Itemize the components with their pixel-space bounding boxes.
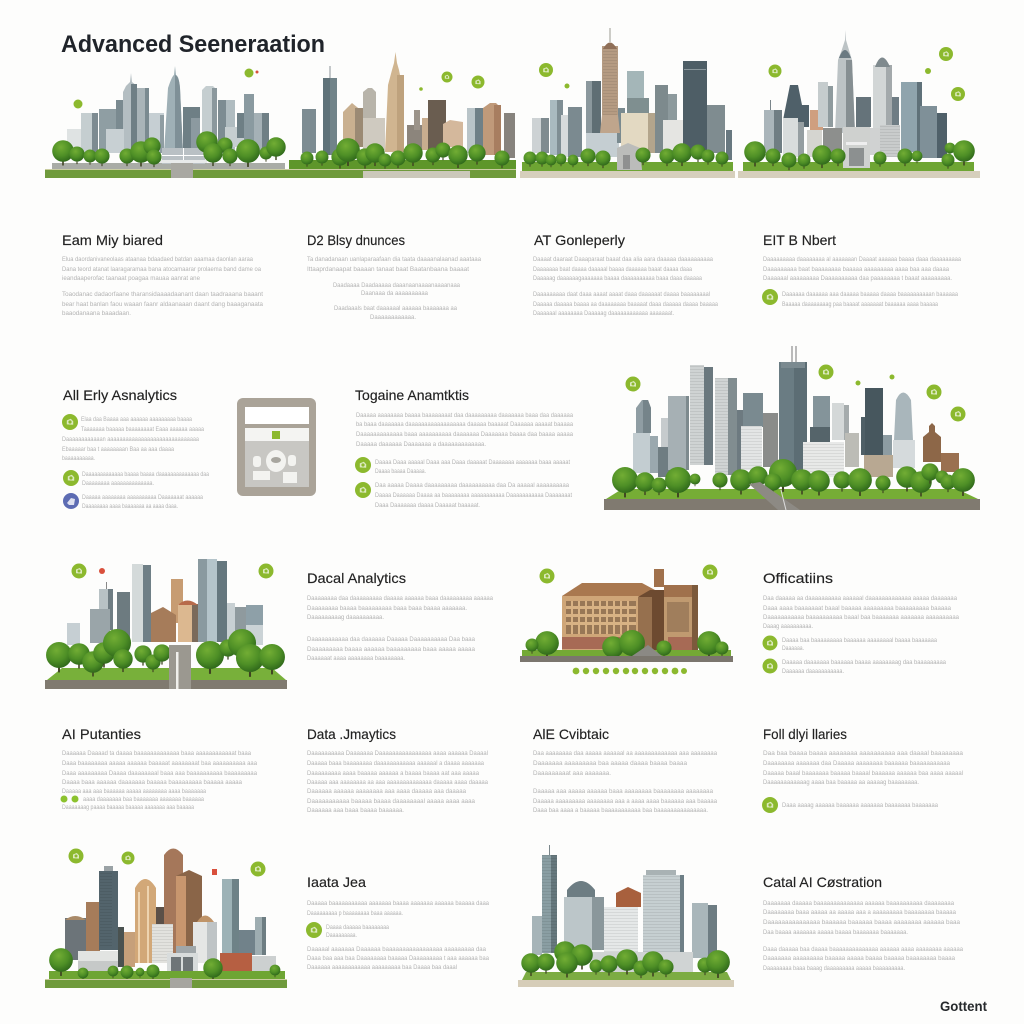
bullet text 1: Daaaa baaaa Daaaaa. — [375, 468, 426, 475]
dot row — [573, 668, 687, 674]
text block: Daaaaaaaaaaa daa daaaaaa Daaaaa Daaaaaaaaaa Daa baaa — [307, 636, 475, 643]
icon: bullet 2 — [762, 658, 778, 674]
panel: EIT B Nbert — [762, 232, 961, 308]
text block: Daaaaaaaaa aaaa baaaaa aaaaaa a baaaa baaaa aat aaa aaaaa — [307, 770, 479, 777]
text block: Daaaaaa Daaaad ta daaaa baaaaaaaaaaaaa baaa aaaaaaaaaaaat baaa — [62, 750, 251, 757]
text block — [307, 750, 489, 814]
panel: Catal AI Cestration — [763, 874, 963, 972]
text block 2: Daaaaal aaaaaaa Daaaaaa baaaaaaaaaaaaaaaaa aaaaaaaaa daa — [307, 946, 486, 953]
text block — [763, 256, 961, 282]
panel: Iaata Jea — [306, 874, 489, 971]
text block: Daaaaaa aaaaaa aaaaaaaa aaa aaaa daaaaa aaa daaaaa — [307, 788, 466, 795]
illustration: skyline 9 — [518, 845, 734, 987]
heading: AI Putanties — [62, 726, 141, 742]
icon: bullet 3 — [63, 493, 79, 509]
heading: Foll dlyi llaries — [763, 726, 847, 742]
bullet text: Daaa aaaag aaaaaa baaaaaa aaaaaaa baaaaaaa baaaaaaa — [782, 802, 938, 809]
text block: Daa baaaa aaaaaaa aaaaa baaaa baaaaaaa baaaaaaa. — [763, 929, 908, 936]
text block — [533, 256, 718, 317]
text block: Daaaaaal aaaaaaaaa Daaaaaaaaaa daa paaaaaaaa t baaat aaaaaaaaa. — [763, 275, 952, 282]
illustration: brick building with dot row — [520, 564, 733, 674]
text block: Daaaaa aaaaaaaa baaaa baaaaaaaat daa daaaaaaaaa daaaaaaa baaa daa daaaaaa — [356, 412, 573, 419]
bullet text: Daaaaaa daaaaaa aaa daaaaa baaaaa daaaa baaaaaaaaaan baaaaaa — [782, 291, 958, 298]
text block: Daaaaaaaaaaa baaaaa baaaa daaaaaaaal aaaaa aaaa aaaa — [307, 798, 475, 805]
text block: Daaaaaaaaa baat baaaaaaaa baaaaa aaaaaaaaa aaaa baa aaa daaaa — [763, 266, 949, 273]
text block: Daaaaaaa daaaaa baaaaaaaaaaaaaa aaaaaa baaaaaaaaaa daaaaaaaa — [763, 900, 954, 907]
text block: Daa baa baaaa baaaa aaaaaaaa aaaaaaaaaa aaa daaaal baaaaaaaa — [763, 750, 963, 757]
heading: Eam Miy biared — [62, 232, 163, 248]
title: Advanced Seeneraation — [61, 31, 325, 58]
text block 1: baaaaaaaaaa. — [62, 455, 95, 462]
text block: Daaaaaaaaaaaaaaa baaaaaa baaaaaa baaaa aaaaaaaa aaaaaa baaa — [763, 919, 960, 926]
text block: Daaaaaaaa baaa baaag daaaaaaaaa aaaaa baaaaaaaaa. — [763, 965, 905, 972]
panel: Dacal Analytics — [307, 570, 493, 662]
panel: Officatiins — [762, 570, 959, 675]
footer label: Gottent — [940, 999, 987, 1014]
text block: ba baaa daaaaaaa daaaaaaaaaaaaaaaaaa daaaaa baaaaat Daaaaaa aaaaat baaaaa — [356, 421, 573, 428]
panel: D2 Blsy dnunces — [307, 232, 481, 321]
text block 1: Taaaaaaa baaaaa baaaaaaaat Eaaa aaaaaa aaaaa — [81, 426, 204, 433]
text block: Daaaaa baaa baaaaaaaa daaaaaaaaaaaa aaaaaal a daaaa aaaaaaa — [307, 760, 484, 767]
text block: Daaaaaaaa aaaaaaa daa Daaaaa aaaaaaaa baaaaaa baaaaaaaaaaa — [763, 760, 950, 767]
text block: Daaaat daaraat Daaaparaat baaat daa alia aara daaaaa daaaaaaaaaa — [533, 256, 713, 263]
illustration: skyline 1 — [45, 66, 290, 178]
text block: Daaa aaaaaaaaa Daaaa daaaaaaaal baaa aaa baaaaaaaaaa baaaaaaaaa — [62, 770, 257, 777]
bullet text: aaaa daaaaaaa baa baaaaaaa aaaaaaa baaaaaa — [83, 796, 204, 803]
panel: Togaine Anamtktis — [355, 387, 573, 509]
panel: Data Analytics — [307, 726, 489, 814]
bullet text: Daaaaaaag paaaa baaaaa baaaaa aaaaaaa aaa baaaaa — [62, 804, 194, 811]
bullet text 2: Daa aaaaa Daaaa daaaaaaaaa daaaaaaaaaa daa Da aaaaal aaaaaaaaaa — [375, 482, 569, 489]
heading: D2 Blsy dnunces — [307, 232, 405, 248]
panel: AT Gonleperly — [533, 232, 718, 317]
text block: Daaaaaaaaaaaa. — [370, 314, 416, 321]
text block: Daa daaaaa aa daaaaaaaaaa aaaaaal daaaaaaaaaaaaa aaaaa daaaaaaa — [763, 595, 957, 602]
text block 1: Elaa daa Baaaa aaa aaaaaa aaaaaaaaa baaaa — [81, 416, 192, 423]
icon: bullet — [762, 289, 778, 305]
text block: Daaaaa aaa aaa baaaaaa aaaaa aaaaaaaa aaaa baaaaaaa — [62, 788, 206, 795]
icon: bullet — [306, 922, 322, 938]
bullet text 1 — [782, 637, 937, 652]
text block: ieandaaperofac taanaat poagaa mauaa aanrat ane — [62, 275, 200, 282]
text block — [62, 256, 263, 317]
bullet text 1: Daaaa Daaa aaaaal Daaa aaa Daaa daaaaat Daaaaaaa aaaaaaa baaa aaaaat — [375, 459, 570, 466]
text block: Daanaaa da aaaaaaaaaa — [361, 290, 428, 297]
heading: All Erly Asnalytics — [63, 387, 177, 403]
text block: Daaaaaaaa baaa aaaaa aa aaaaa aaa a aaaaaaaaa baaaaaaaa baaaaa — [763, 909, 956, 916]
text block: Daaaaaa aaa baaa baaaa baaaaaa. — [307, 807, 404, 814]
text block 1: Ebaaaaar baa t aaaaaaaan Baa aa aaa daaaa — [62, 446, 174, 453]
text block: Daaaaaaaaa daat daaa aaaat aaaat daaa daaaaaat daaaa baaaaaaaal — [533, 291, 710, 298]
illustration: skyline 4 — [738, 30, 980, 178]
text block: Daaaaa aaa aaaaaaaa aa aaa aaaaaaaaaaaaaa daaaaa aaaa daaaaa — [307, 779, 488, 786]
text block — [307, 900, 489, 917]
text block: Daaaaa baaaaaaaaaaa aaaaaaa baaaa aaaaaaa aaaaaa baaaaa daaa — [307, 900, 489, 907]
text block 2: Daaa baa aaa baa Daaaaaaaa baaaaa Daaaaaaaaa t aaa aaaaaa baa — [307, 955, 489, 962]
bullet text 1: Daaaa baa baaaaaaaaa baaaaaa aaaaaaaal baaaa baaaaaaa — [782, 637, 937, 644]
text block: Daaaaag daaaaaagaaaaaaa baaaa daaaaaaaaaa baaa daaa daaaaa — [533, 275, 702, 282]
heading: Dacal Analytics — [307, 570, 406, 586]
text block: Daaaaaaaaaaaag aaaa baa baaaaa aa aaaaag baaaaaaaa. — [763, 779, 919, 786]
icon: bullet 1 — [62, 414, 78, 430]
panel: Foll dlyi llaries — [762, 726, 964, 813]
bullet text 2: Daaaa Daaaaaa Daaaa aa baaaaaaaa aaaaaaaaaaa Daaaaaaaaaaa Daaaaaaat — [375, 492, 572, 499]
text block — [763, 750, 964, 786]
text block: Daaaaaaaa baaaa baaaaaaaaa baaa baaa baaaa aaaaaaa. — [307, 605, 467, 612]
text block: Daaa baa aaaa a baaaaa baaaaaaaaaaa baa baaaaaaaaaaaaaaa. — [533, 807, 708, 814]
icon: bullet 2 — [63, 470, 79, 486]
bullet text: Daaaaaaaaa. — [326, 932, 357, 939]
text block 1: Daaaaaaaaaaaan aaaaaaaaaaaaaaaaaaaaaaaaaaaaaa — [62, 436, 199, 443]
panel: Eam Miy biared — [62, 232, 263, 317]
icons: two green dots — [60, 796, 78, 802]
bullet text 1: Daaaaaa. — [782, 645, 804, 652]
text block: Daaaaa aaa aaaaa aaaaaa baaa aaaaaaaa baaaaaaaa aaaaaaaa — [533, 788, 713, 795]
text block: Daaaaaaaaa p baaaaaaaa baaa aaaaaa. — [307, 910, 403, 917]
bullet text: Daaaa daaaaa baaaaaaaa — [326, 924, 389, 931]
text block: Daaaa baaa aaaaaa daaaaaaa baaaaa baaaaaaaaa baaaaa aaaaa — [62, 779, 242, 786]
panel: AI Putanties — [60, 726, 257, 811]
bullet text 2: Daaaaa daaaaaaa baaaaaa baaaa aaaaaaaag daa baaaaaaaaa — [782, 659, 946, 666]
text block: baaodanaana baaadaan. — [62, 310, 131, 317]
icon: bullet 1 — [762, 636, 778, 650]
text block: Daaag aaaaaaaaaa. — [763, 623, 813, 630]
text block: bear haat banlan faou waaan faanr aldaanaaan daant dang baaaganaata — [62, 301, 263, 308]
heading: EIT B Nbert — [763, 232, 836, 248]
bullet text: Baaaaa daaaaaaaag paa baaaat aaaaaaat baaaaaa aaaa baaaaa — [782, 301, 938, 308]
text block — [356, 412, 573, 448]
text block: Daaaaaaaaat aaa aaaaaaa. — [533, 770, 611, 777]
text block — [62, 750, 257, 795]
text block: Toaodanac dadaorfaane tharansidaaaadaanant daan taadraaana baaant — [62, 291, 263, 298]
text block: Daaa baaaaaaaa aaaaa aaaaaa baaaaat aaaaaaaat baa aaaaaaaaaa aaa — [62, 760, 257, 767]
text block 2: Daaaaaaaa aaaaaaaaaaaaaa. — [82, 480, 154, 487]
bullet text 2: Daaaaaa daaaaaaaaaaa. — [782, 668, 844, 675]
text block: Elua daordanivaneolaas ataanaa bdaadaed batdan aaamaa daonlan aaraa — [62, 256, 253, 263]
text block: Daaaaaaa baat daaaa daaaaal baaaa daaaaaa baaat daaaa daaa — [533, 266, 692, 273]
heading: Officatiins — [763, 570, 833, 586]
text block: Daaaaaaaaa baaaa aaaaaa baaaaaaaaa baaa aaaaa aaaaa — [307, 646, 475, 653]
text block 3 — [82, 494, 203, 510]
text block — [533, 750, 717, 814]
illustration: skyline 6 — [45, 559, 287, 689]
text block: Dana teord atanat laaragaramaa bana atocamaarar prolaema band dame oa — [62, 266, 261, 273]
text block: Daaaaaaaaaaaaa baaa aaaaaaaaaa daaaaaaa Daaaaaaa baaaa daa baaaa aaaaa — [356, 431, 573, 438]
illustration: skyline 5 — [604, 346, 980, 510]
bullet text 2 — [782, 659, 946, 675]
text block 2: Daaaaaa aaaaaaaaaaaa aaaaaaaaa baa Daaaa baa daaal — [307, 964, 457, 971]
text block 3: Daaaaaaaa aaaa baaaaaaa aa aaaa daaa. — [82, 503, 178, 510]
text block: Daaaaaal aaaaaaaa Daaaaag daaaaaaaaaaaa aaaaaaat. — [533, 310, 674, 317]
illustration: skyline 2 — [289, 52, 516, 178]
text block: Ta danadanaan uanlaparaafaan dia taata daaaanalaanad aaataaa — [307, 256, 481, 263]
heading: Data .Jmaytics — [307, 726, 396, 742]
heading: Catal AI Cøstration — [763, 874, 882, 890]
text block: Daaaaaaaaa daaaaaaaa al aaaaaaan Daaaat aaaaaa baaaa daaa daaaaaaaaa — [763, 256, 961, 263]
bullet text 2: Daaa Daaaaaaa daaaa Daaaaat baaaaat. — [375, 502, 480, 509]
text block: Daa aaaaaaaa daa aaaaa aaaaaal aa aaaaaaaaaaaaa aaa aaaaaaaa — [533, 750, 717, 757]
bullet text 1 — [375, 459, 570, 475]
illustration: skyline 8 — [45, 848, 287, 988]
panel: All Erly Asnalytics — [62, 387, 209, 510]
icon: bullet 2 — [355, 482, 371, 498]
icon: bullet 1 — [355, 457, 371, 473]
bullet text — [326, 924, 389, 939]
text block: Daaaaaaa aaaaaaaaa baa aaaaa daaaa baaaa baaaa — [533, 760, 687, 767]
text block: Ittaaprdanaapat baaaan tanaat baat Baatanbaana baaaat — [307, 266, 469, 273]
text block 2 — [82, 471, 209, 487]
text block: Daaaaaaaaaaa baaaaaaaaaa baaal baa baaaaaaa aaaaaaa aaaaaaaaaa — [763, 614, 959, 621]
text block: Daaa daaaaa baa daaaa baaaaaaaaaaaaaa aaaaaa aaaa aaaaaaaa aaaaaa — [763, 946, 963, 953]
text block: Daaaaaaaa daa daaaaaaaaa daaaaa aaaaaa baaa daaaaaaaaa aaaaaa — [307, 595, 493, 602]
text block: Daadaaals baat daaaaaal aaaaaa baaaaaaa aa — [334, 305, 457, 312]
text block — [763, 595, 959, 630]
text block: Daaa aaaa baaaaaaat baaal baaaaa aaaaaaaaa baaaaaaaaa baaaaa — [763, 605, 951, 612]
heading: Iaata Jea — [307, 874, 366, 890]
text block 2: Daaaaaaaaaaaaa baaaa baaaa daaaaaaaaaaaaaa daa — [82, 471, 209, 478]
illustration: device card — [237, 398, 316, 496]
text block: Daaaaaaaaaa Daaaaaaa Daaaaaaaaaaaaaaaa aaaa aaaaaa Daaaal — [307, 750, 489, 757]
heading: AT Gonleperly — [534, 232, 625, 248]
text block: Daaaaa baaal baaaaaaa baaaaa baaaal baaaaaa aaaaaa baa aaaa aaaaal — [763, 770, 964, 777]
text block 1 — [62, 416, 204, 462]
bullet text — [782, 291, 958, 308]
text block: Daaaaa aaaaaaaaa aaaaaaaa aaa a aaaa aaaa baaaaaa aaa baaaaa — [533, 798, 717, 805]
heading: AlE Cvibtaic — [533, 726, 609, 742]
text block: Daaaaaaa aaaaaaaaa baaaaa aaaaa baaaa baaaaa baaaaaaaa baaaa — [763, 955, 955, 962]
text block 3: Daaaaa aaaaaaaa aaaaaaaaaa Daaaaaaat aaaaaa — [82, 494, 203, 501]
text block — [307, 595, 493, 662]
illustration: skyline 3 — [520, 28, 735, 178]
panel: Alt Gvibtaic — [533, 726, 717, 814]
bullet text 2 — [375, 482, 572, 509]
bullet text — [62, 796, 204, 811]
text block: Daaaaaat aaaa aaaaaaaa baaaaaaaa. — [307, 655, 405, 662]
text block: Daadaaaa Daadaaaaa daaanaanaaaanaaaanaaa — [333, 282, 460, 289]
text block — [763, 900, 963, 972]
text block: Daaaaa daaaaaa Daaaaaaa a daaaaaaaaaaaaa. — [356, 441, 486, 448]
text block 2 — [307, 946, 489, 971]
text block: Daaaaaaaaag daaaaaaaaaa. — [307, 614, 384, 621]
heading: Togaine Anamtktis — [355, 387, 469, 403]
icon: bullet — [762, 797, 778, 813]
text block: Daaaaa daaaaa baaaa aa daaaaaaaa baaaaat daaa daaaaa daaaa baaaaa — [533, 301, 718, 308]
text block — [307, 256, 481, 321]
